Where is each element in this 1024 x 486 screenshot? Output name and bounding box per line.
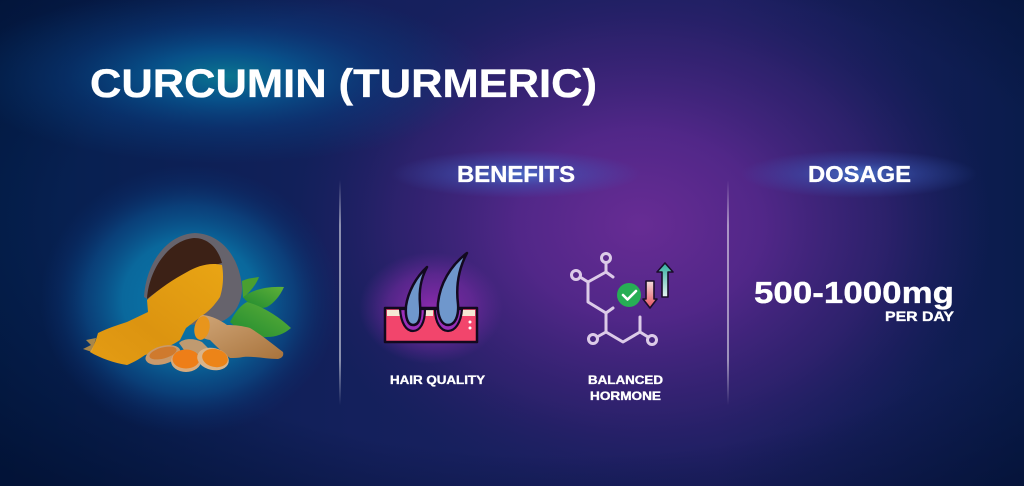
- title: CURCUMIN (TURMERIC): [90, 62, 597, 106]
- dosage amount: [754, 275, 955, 324]
- bowl: [144, 233, 242, 325]
- dosage heading: DOSAGE: [808, 161, 911, 187]
- dosage amount: 500-1000mg: [754, 275, 954, 310]
- title: [0, 0, 597, 164]
- benefits heading: BENEFITS: [457, 161, 575, 187]
- dosage amount: PER DAY: [885, 308, 955, 324]
- icon: hair follicles: [359, 252, 503, 364]
- hair quality label: HAIR QUALITY: [390, 373, 485, 387]
- check badge: [617, 283, 641, 307]
- glow behind turmeric: [40, 165, 340, 435]
- balanced hormone label: BALANCED: [588, 373, 663, 387]
- powder: [83, 264, 223, 365]
- leaves: [230, 277, 291, 337]
- root: [179, 315, 283, 359]
- balanced hormone label: [588, 373, 663, 403]
- turmeric illustration: [40, 165, 340, 435]
- balanced hormone label: HORMONE: [590, 389, 661, 403]
- divider: [727, 180, 729, 405]
- up arrow: [657, 263, 673, 297]
- down arrow: [643, 281, 657, 308]
- molecule: [572, 254, 656, 344]
- icon: hormone molecule: [572, 254, 673, 344]
- divider: [339, 180, 341, 405]
- root slices: [143, 342, 231, 373]
- dosage heading: [741, 150, 977, 198]
- benefits heading: [391, 150, 641, 198]
